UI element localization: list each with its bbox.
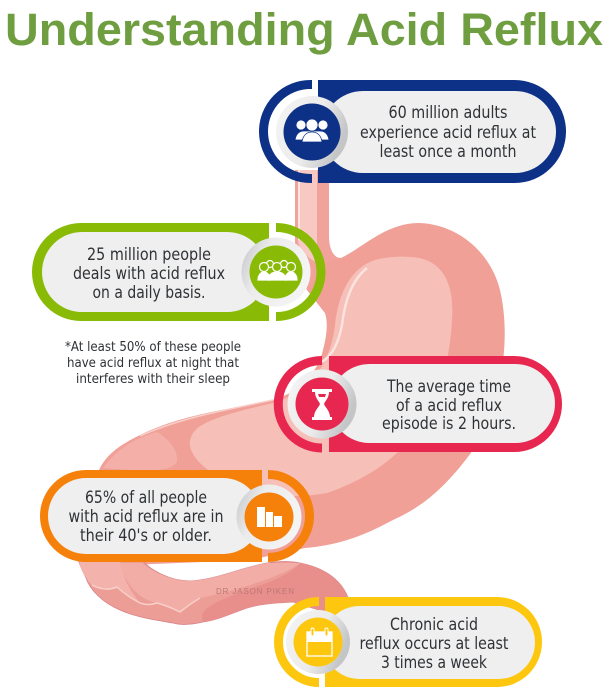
stomach body (97, 223, 505, 565)
stomach illustration (78, 170, 505, 624)
text: 60 million adults (388, 103, 508, 122)
text: deals with acid reflux (73, 264, 225, 283)
text: of a acid reflux (396, 396, 502, 415)
text (382, 377, 516, 433)
text: 65% of all people (85, 488, 207, 507)
footnote: *At least 50% of these people (65, 340, 241, 355)
icon: calendar (307, 628, 332, 656)
footnote: interferes with their sleep (76, 372, 230, 387)
text: reflux occurs at least (360, 634, 509, 653)
stomach highlight (322, 268, 367, 362)
text (68, 488, 224, 545)
text: with acid reflux are in (68, 507, 224, 526)
text: episode is 2 hours. (382, 414, 516, 433)
text: on a daily basis. (92, 283, 206, 302)
intestine dark end (202, 563, 349, 622)
callout: average time (278, 356, 562, 452)
text: The average time (386, 377, 511, 396)
text: Chronic acid (390, 615, 478, 634)
text (360, 615, 509, 672)
stomach inner light area (190, 257, 452, 496)
footnote: have acid reflux at night that (67, 356, 239, 371)
intestine light band (120, 563, 300, 612)
icon: bar chart (257, 507, 282, 527)
callout: chronic acid reflux (278, 597, 542, 687)
intestine left band (79, 562, 140, 603)
text: 25 million people (87, 245, 211, 264)
intestine scalloped highlight (92, 585, 200, 612)
icon: hourglass (312, 389, 332, 420)
callout: 60 million adults (264, 80, 566, 183)
text: their 40's or older. (80, 526, 212, 545)
text: experience acid reflux at (360, 123, 536, 142)
icon: people (295, 119, 329, 142)
text: 3 times a week (381, 653, 487, 672)
callout: 65% of all people (40, 470, 309, 562)
footnote (65, 340, 241, 387)
text (360, 103, 536, 161)
small intestine (78, 560, 349, 624)
esophagus (295, 170, 360, 330)
watermark: DR JASON PIKEN (216, 587, 294, 596)
icon: crowd (258, 260, 297, 280)
title: Understanding Acid Reflux (5, 4, 603, 55)
left lobe highlight (103, 432, 177, 470)
callout: 25 million people (32, 223, 321, 321)
text: least once a month (380, 142, 516, 161)
text (73, 245, 225, 302)
